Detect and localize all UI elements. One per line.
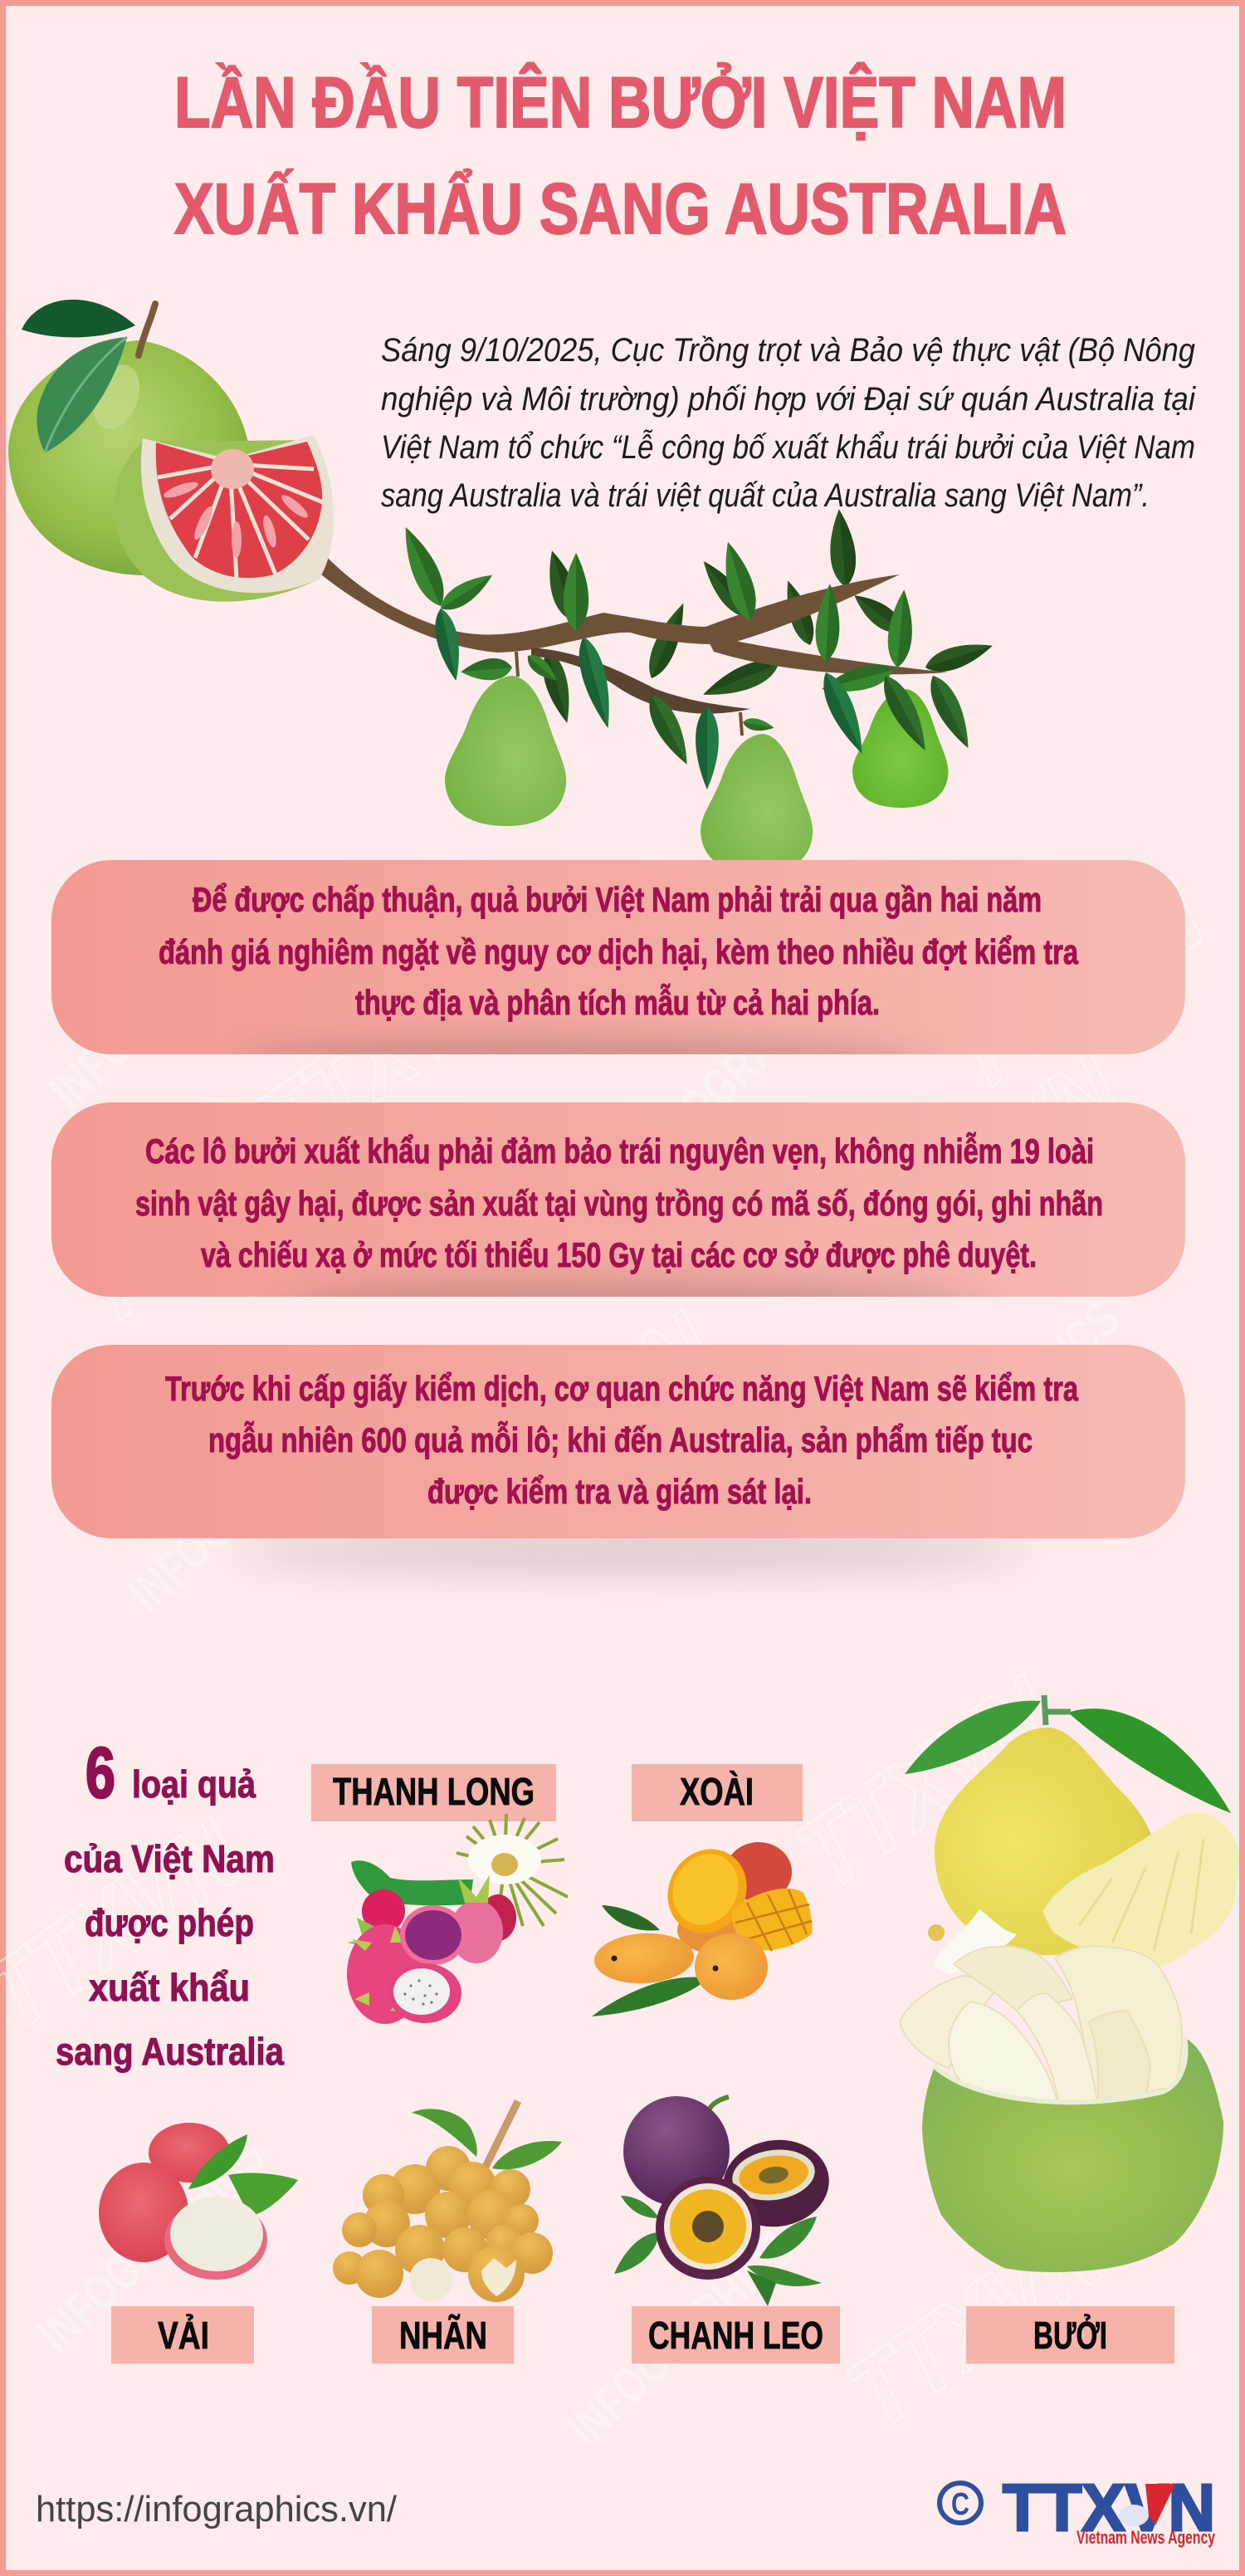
watermarks: TTXVN: [239, 926, 535, 1180]
label: chanh leo: [632, 2306, 840, 2363]
green bowl: [922, 2037, 1223, 2272]
icon: big pomelo: [900, 1695, 1239, 2272]
panel: card 3: ngẫu nhiên 600 quả mỗi lô; khi đến Australia, sản phẩm tiếp tục: [208, 1420, 1033, 1459]
label: thanh long: [311, 1764, 556, 1821]
hanging fruit A: [445, 676, 566, 826]
watermarks: TTXVN: [779, 1656, 1075, 1910]
watermarks: INFOGRAPHICS: [27, 2126, 276, 2363]
label: xoai: XOÀI: [680, 1770, 754, 1813]
heading: 6 fruits: của Việt Nam: [64, 1837, 275, 1880]
whole green pomelo: [8, 340, 251, 575]
heading: 6 fruits: loại quả: [132, 1762, 256, 1806]
panel: card 3: được kiểm tra và giám sát lại.: [427, 1472, 812, 1511]
heading: 6 fruits: sang Australia: [56, 2030, 284, 2073]
icon: dragon fruit: [347, 1814, 568, 2024]
panel: card 3: [51, 1345, 1185, 1538]
panel: card 1: [51, 860, 1185, 1054]
heading: 6 fruits: 6: [85, 1733, 115, 1813]
icon: longan: [333, 2101, 562, 2302]
slice rind: [114, 440, 330, 602]
logo: TTXVN: TTXVN: [1003, 2471, 1215, 2544]
heading: 6 fruits: được phép: [85, 1901, 254, 1944]
illustration: branch with pomelos: [311, 508, 996, 873]
watermarks: INFOGRAPHICS: [881, 1290, 1130, 1528]
leaf left: [905, 1701, 1041, 1774]
watermarks: INFOGRAPHICS: [118, 1386, 367, 1623]
intro text: sang Australia và trái việt quất của Australia sang Việt Nam”.: [381, 477, 1150, 514]
title: XUẤT KHẨU SANG AUSTRALIA: [174, 169, 1067, 249]
slice pith: [141, 435, 334, 593]
label: xoai: [632, 1764, 803, 1821]
yellow pomelo body: [935, 1728, 1157, 1955]
label: vai: [111, 2306, 254, 2363]
icon: lychee: [99, 2123, 298, 2280]
front leaves: [394, 522, 979, 770]
icon: passion fruit: [614, 2096, 835, 2306]
title: LẦN ĐẦU TIÊN BƯỞI VIỆT NAM: [174, 63, 1067, 143]
copyright mark: C: [951, 2487, 969, 2522]
watermarks: TTXVN: [56, 1092, 353, 1346]
watermarks: INFOGRAPHICS: [39, 882, 288, 1120]
mid leaf: [37, 337, 127, 452]
illustration: green pomelo and slice: [8, 300, 334, 602]
label: buoi: [966, 2306, 1174, 2363]
hanging fruit B: [701, 734, 813, 873]
flesh lobes: [900, 1946, 1182, 2104]
watermarks: [0, 859, 1224, 2457]
leaf right: [1068, 1708, 1231, 1813]
label: nhan: NHÃN: [399, 2314, 487, 2357]
label: thanh long: THANH LONG: [333, 1770, 535, 1813]
watermarks: TTXVN: [828, 2196, 1125, 2450]
heading: 6 fruits: [56, 1733, 284, 2073]
intro text: [381, 332, 1196, 514]
stem: [1044, 1695, 1071, 1725]
icon: mango: [592, 1835, 813, 2016]
watermarks: TTXVN: [438, 1291, 735, 1545]
title: [174, 63, 1067, 249]
watermarks: INFOGRAPHICS: [624, 941, 873, 1179]
label: nhan: [372, 2306, 514, 2363]
panel: card 2: [51, 1102, 1185, 1297]
red fan of segments: [156, 442, 322, 578]
back leaves: [537, 508, 996, 726]
panel: card 3 shadow: [232, 1532, 1029, 1569]
url: https://infographics.vn/: [36, 2489, 398, 2530]
branch: [311, 548, 948, 714]
panel: card 1: thực địa và phân tích mẫu từ cả hai phía.: [355, 982, 880, 1022]
heading: 6 fruits: xuất khẩu: [89, 1966, 250, 2009]
dark leaf: [22, 300, 135, 337]
label: buoi: BƯỞI: [1033, 2314, 1107, 2357]
watermarks: INFOGRAPHICS: [556, 2220, 805, 2457]
copyright mark: [940, 2483, 981, 2523]
hanging fruit C: [852, 689, 949, 808]
intro text: nghiệp và Môi trường) phối hợp với Đại sứ quán Australia tại: [381, 381, 1196, 418]
label: vai: VẢI: [158, 2314, 209, 2357]
watermarks: TTXVN: [845, 1034, 1141, 1288]
label: chanh leo: CHANH LEO: [648, 2314, 823, 2357]
peeled segment: [1042, 1813, 1239, 1968]
white flower: [934, 1909, 1017, 1974]
